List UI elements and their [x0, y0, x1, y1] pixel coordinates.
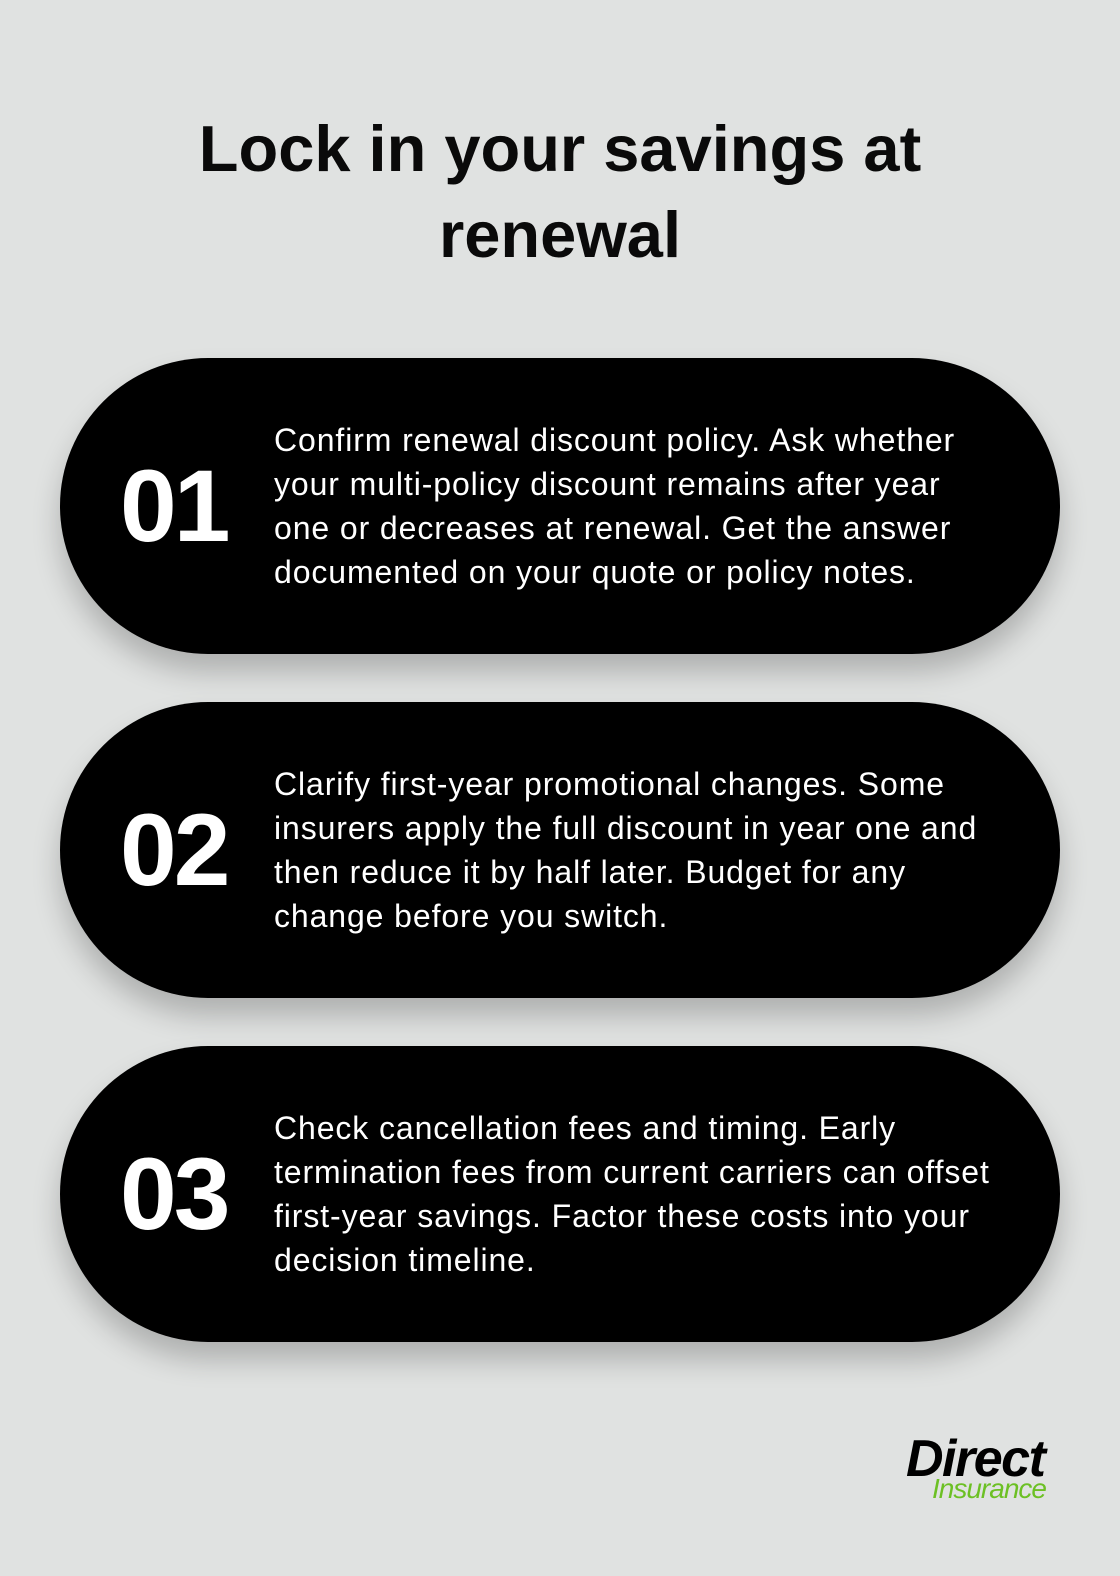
text 03: Check cancellation fees and timing. Early [274, 1110, 896, 1146]
text 02 [274, 766, 977, 934]
text 03: decision timeline. [274, 1242, 536, 1278]
title [199, 112, 921, 271]
text 03: termination fees from current carriers can offset [274, 1154, 990, 1190]
text 02: Clarify first-year promotional changes. Some [274, 766, 945, 802]
text 01: documented on your quote or policy notes. [274, 554, 916, 590]
number 02: 02 [120, 793, 227, 907]
text 03 [274, 1110, 990, 1278]
text 03: first-year savings. Factor these costs into your [274, 1198, 970, 1234]
title: Lock in your savings at [199, 112, 921, 185]
panel: step 01 [60, 358, 1060, 654]
number 01: 01 [120, 449, 227, 563]
panel: step 03 [60, 1046, 1060, 1342]
title: renewal [439, 198, 681, 271]
text 01: Confirm renewal discount policy. Ask whether [274, 422, 955, 458]
text 01: your multi-policy discount remains after year [274, 466, 941, 502]
panel: step 02 [60, 702, 1060, 998]
text 02: insurers apply the full discount in year one and [274, 810, 977, 846]
text 01: one or decreases at renewal. Get the answer [274, 510, 951, 546]
text 02: then reduce it by half later. Budget for any [274, 854, 906, 890]
text 02: change before you switch. [274, 898, 668, 934]
logo: Insurance [932, 1473, 1046, 1504]
logo: Direct [906, 1430, 1044, 1488]
number 03: 03 [120, 1137, 227, 1251]
text 01 [274, 422, 955, 590]
